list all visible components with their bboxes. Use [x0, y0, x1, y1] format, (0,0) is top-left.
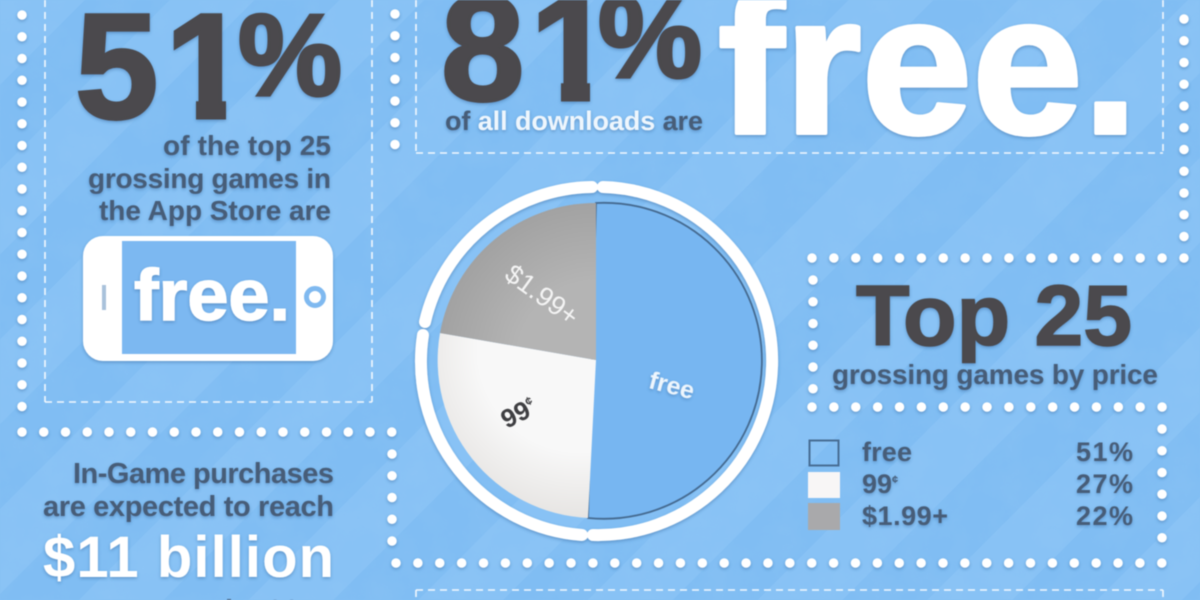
- text: of all downloads are: of all downloads are: [445, 106, 703, 136]
- panel: in-game purchases: [43, 458, 334, 600]
- text: of the top 25 grossing games: grossing games in: [88, 163, 331, 194]
- legend labels: [862, 437, 948, 531]
- icon: phone with free: free.: [134, 256, 290, 336]
- text: in-game purchases: are expected to reach: [43, 491, 334, 523]
- label: free: free: [646, 367, 698, 405]
- legend labels: 99: [862, 469, 892, 499]
- text: of the top 25 grossing games: of the top 25: [163, 130, 331, 161]
- text: grossing games by price: grossing games by price: [832, 359, 1158, 390]
- legend labels: $1.99+: [862, 501, 948, 531]
- legend: [808, 437, 1133, 531]
- legend labels: ¢: [892, 474, 898, 486]
- heading: Top 25: Top 25: [856, 269, 1132, 364]
- label: 99 cents: ¢: [522, 393, 535, 409]
- label: 99 cents: 99: [496, 394, 535, 434]
- label: $1.99+: $1.99+: [499, 258, 585, 332]
- panel: 51 percent of top games: [75, 0, 342, 361]
- ring: [421, 187, 772, 535]
- legend values: 22%: [1076, 501, 1133, 531]
- legend values: 27%: [1076, 469, 1133, 499]
- legend labels: free: [862, 437, 912, 467]
- pie chart: [421, 187, 772, 535]
- legend values: [1076, 437, 1133, 531]
- legend swatch: $1.99+: [808, 503, 840, 530]
- text: in-game purchases: In-Game purchases: [73, 458, 334, 490]
- icon: phone with free: [83, 236, 333, 361]
- panel: top 25 heading: [832, 269, 1158, 390]
- heading: 51%: [76, 12, 342, 124]
- text: in-game purchases: [43, 458, 334, 523]
- text: of the top 25 grossing games: the App Store are: [99, 195, 331, 226]
- heading: 81%: [442, 0, 702, 106]
- heading: $11 billion: $11 billion: [43, 525, 334, 590]
- legend values: 51%: [1076, 437, 1133, 467]
- slice: 99 cents: [438, 333, 596, 518]
- panel: 81 percent free: [442, 0, 1128, 140]
- text: of the top 25 grossing games: [88, 130, 331, 226]
- slice: $1.99+: [440, 203, 596, 360]
- slice: free: [588, 203, 762, 519]
- legend swatch: 99 cents: [808, 472, 840, 498]
- legend swatch: free: [810, 440, 838, 466]
